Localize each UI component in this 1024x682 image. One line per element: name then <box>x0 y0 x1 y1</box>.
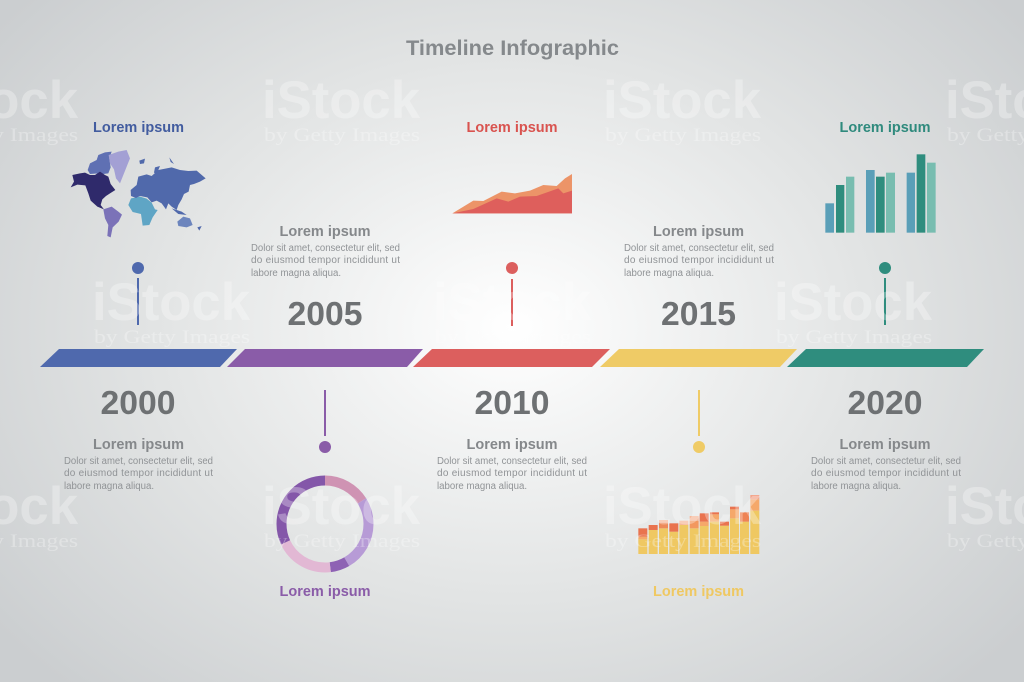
timeline ribbon <box>40 349 984 367</box>
text block: labore magna aliqua. <box>624 268 714 279</box>
text block: do eiusmod tempor incididunt ut <box>64 468 213 479</box>
watermarks: by Getty Images <box>264 125 420 146</box>
segment 2000 <box>40 349 237 367</box>
text block: labore magna aliqua. <box>437 481 527 492</box>
text block: Dolor sit amet, consectetur elit, sed <box>437 456 587 467</box>
text block: Lorem ipsum <box>840 436 930 453</box>
text block: do eiusmod tempor incididunt ut <box>251 255 400 266</box>
text block: Dolor sit amet, consectetur elit, sed <box>811 456 961 467</box>
watermarks: by Getty Images <box>264 531 420 552</box>
pin <box>879 262 891 325</box>
text block <box>437 436 587 492</box>
pin <box>132 262 144 325</box>
heading: 2010 icon: Lorem ipsum <box>466 119 558 136</box>
title: Timeline Infographic <box>406 37 619 60</box>
segment 2020 <box>787 349 984 367</box>
panel: 2010 <box>437 119 587 492</box>
pin <box>319 390 331 453</box>
icon: grouped bar chart <box>825 154 936 233</box>
year: 2020 <box>848 384 922 421</box>
heading: 2020 icon: Lorem ipsum <box>840 119 930 136</box>
year: 2000 <box>100 384 176 421</box>
watermarks: iStock <box>603 477 762 536</box>
watermarks: iStock <box>262 71 421 130</box>
year: 2010 <box>474 384 550 421</box>
heading: 2000 icon: Lorem ipsum <box>93 119 184 136</box>
icon: area chart <box>452 174 572 213</box>
text block: do eiusmod tempor incididunt ut <box>437 468 587 479</box>
text block <box>624 223 774 279</box>
icon: donut chart <box>282 480 368 568</box>
segment 2015 <box>600 349 797 367</box>
watermarks: by Getty Images <box>605 531 761 552</box>
watermarks: by Getty Images <box>435 327 591 348</box>
watermarks <box>0 71 1024 552</box>
text block <box>64 436 213 492</box>
text block: Dolor sit amet, consectetur elit, sed <box>251 243 400 254</box>
watermarks: by Getty Images <box>605 125 761 146</box>
watermarks: by Getty Images <box>776 327 932 348</box>
text block <box>811 436 961 492</box>
watermarks: iStock <box>92 273 251 332</box>
text block: Lorem ipsum <box>93 436 184 453</box>
panel: 2015 <box>624 223 774 600</box>
text block: Lorem ipsum <box>466 436 558 453</box>
panel: 2005 <box>251 223 400 600</box>
year: 2015 <box>661 295 736 332</box>
watermarks: iStock <box>262 477 421 536</box>
heading: 2005 icon: Lorem ipsum <box>280 583 370 600</box>
icon: stacked bar chart <box>638 495 759 554</box>
text block: Lorem ipsum <box>653 223 744 240</box>
text block: Dolor sit amet, consectetur elit, sed <box>64 456 213 467</box>
text block: labore magna aliqua. <box>251 268 341 279</box>
watermarks: by Getty Images <box>94 327 250 348</box>
text block: do eiusmod tempor incididunt ut <box>811 468 961 479</box>
pin <box>506 262 518 326</box>
pin <box>693 390 705 453</box>
panel: 2000 <box>64 119 213 492</box>
icon: world map <box>71 150 206 237</box>
watermarks: iStock <box>433 273 592 332</box>
segment 2005 <box>227 349 423 367</box>
watermarks: iStock <box>603 71 762 130</box>
text block <box>251 223 400 279</box>
watermarks: iStock <box>774 273 933 332</box>
segment 2010 <box>413 349 610 367</box>
panel: 2020 <box>811 119 961 492</box>
text block: labore magna aliqua. <box>811 481 901 492</box>
heading: 2015 icon: Lorem ipsum <box>653 583 744 600</box>
text block: Dolor sit amet, consectetur elit, sed <box>624 243 774 254</box>
text block: Lorem ipsum <box>280 223 370 240</box>
text block: do eiusmod tempor incididunt ut <box>624 255 774 266</box>
year: 2005 <box>288 295 362 332</box>
text block: labore magna aliqua. <box>64 481 154 492</box>
